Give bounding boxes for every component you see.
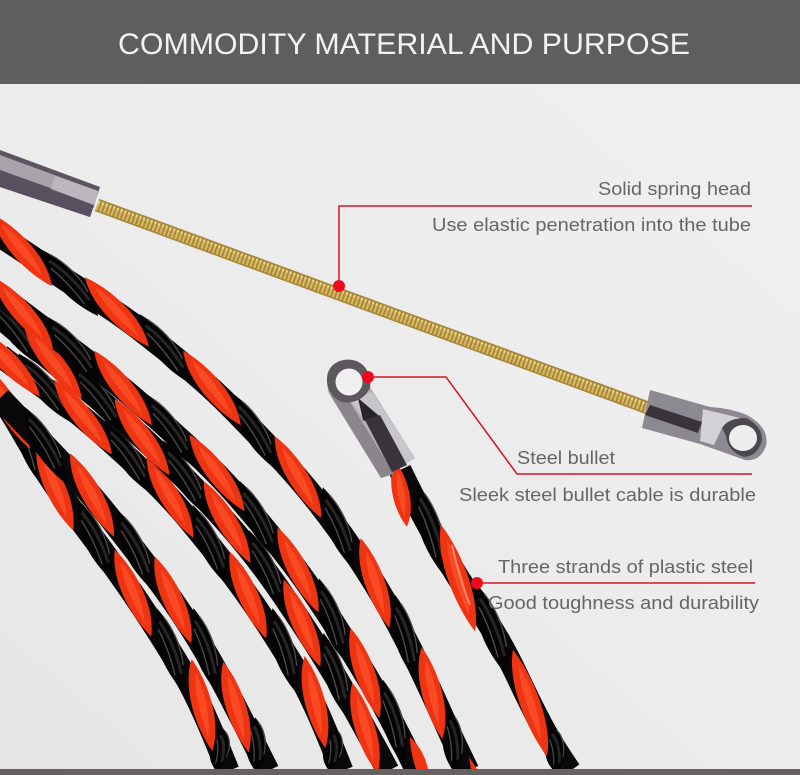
right cable [378,460,577,775]
bullet eye [327,360,370,402]
callout description: Sleek steel bullet cable is durable [459,484,756,505]
spring wire with steel bullet ends [0,150,767,460]
callout title: Three strands of plastic steel [498,556,753,577]
callout 3: plastic steel strands [471,556,760,613]
red dot [333,280,345,292]
cable: lowest left twisted strand [0,364,239,772]
brass spring [97,202,649,408]
cable: third strand [0,326,352,772]
leader line [339,206,752,286]
cable: top strand [0,212,477,774]
title: COMMODITY MATERIAL AND PURPOSE [118,28,690,61]
bullet neck and hex flat [358,398,378,425]
callout description: Good toughness and durability [488,592,760,613]
callout 1: spring head [333,178,752,292]
leader line [477,582,755,584]
callout 2: steel bullet [362,371,756,505]
bottom band [0,769,800,775]
red dot [471,577,483,589]
cable: fourth strand [0,293,397,774]
header band [0,0,800,84]
callout title: Steel bullet [517,447,615,468]
left metal sleeve [0,150,100,217]
bullet body [327,360,415,478]
callout description: Use elastic penetration into the tube [432,214,751,235]
cable: second lower strand [0,398,278,773]
leader line [368,377,752,474]
red dot [362,371,374,383]
steel bullet and right cable [327,360,577,775]
callout title: Solid spring head [598,178,751,199]
cable: fifth strand [0,275,428,771]
right steel bullet [642,390,767,460]
